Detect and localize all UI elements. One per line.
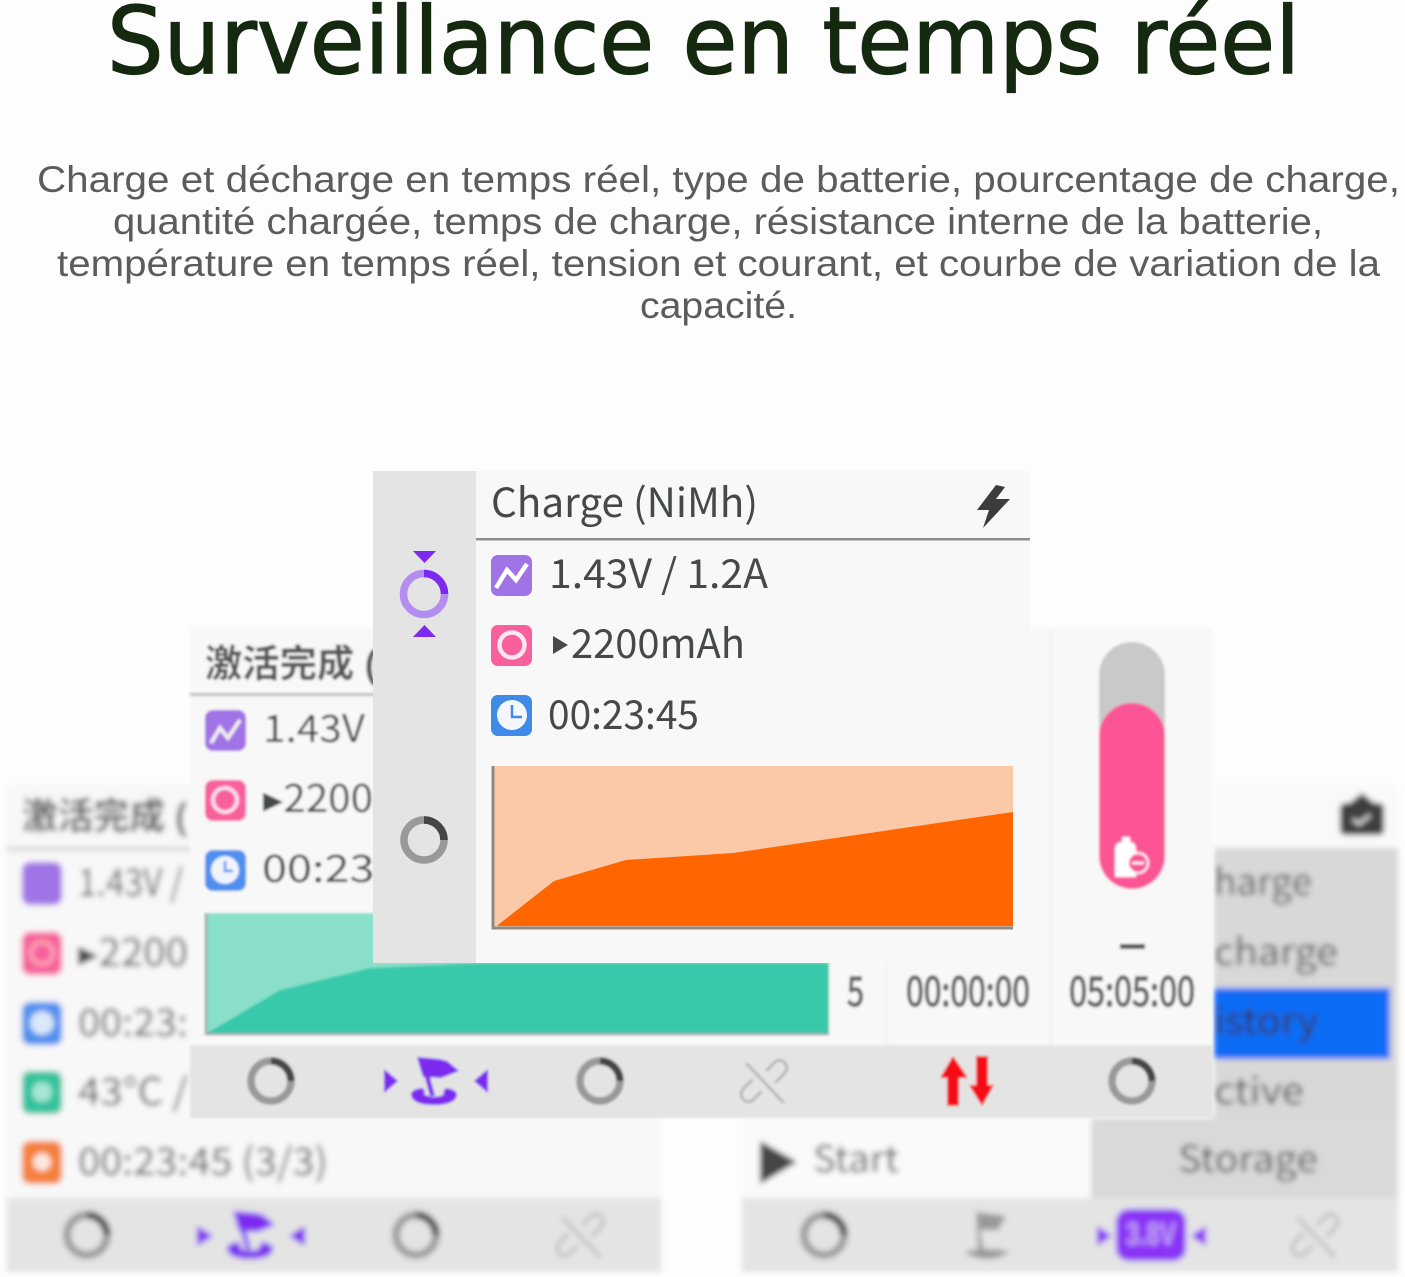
panel: back right screen (blurred): Storage	[1178, 1129, 1318, 1183]
panel: back right screen (blurred): istory	[1214, 991, 1318, 1045]
panel: back right screen (blurred)	[742, 785, 1398, 1272]
battery slider	[1099, 642, 1165, 889]
header: middle: 激活完成 (	[205, 644, 377, 686]
panel: back right screen (blurred): harge	[1214, 852, 1312, 906]
storage button	[1091, 1118, 1398, 1198]
bottom toolbar: back right: 3.8V	[1126, 1216, 1176, 1252]
description text block: Charge et décharge en temps réel, type de batterie, pourcentage de charge,	[37, 159, 1400, 200]
bottom toolbar: back right	[742, 1198, 1398, 1272]
panel: middle screen: 00:23:	[262, 838, 387, 893]
description text block	[37, 159, 1400, 326]
row: capacity: 2200mAh	[571, 612, 745, 670]
row: voltage and current: 1.43V / 1.2A	[549, 542, 769, 600]
row icon: voltage	[205, 710, 246, 751]
header: back left: 激活完成 (	[22, 796, 188, 837]
panel: back right screen (blurred): charge	[1214, 922, 1338, 976]
stat values: 5	[847, 958, 864, 1018]
row icon: duration	[22, 1141, 62, 1184]
panel: back left screen (blurred): 43°C /	[78, 1061, 188, 1116]
panel: middle screen: 05:05:00	[1069, 958, 1195, 1018]
start row	[742, 1118, 1090, 1198]
panel: back right screen (blurred): ctive	[1214, 1061, 1304, 1115]
bottom toolbar: back left	[7, 1198, 661, 1272]
description text block: température en temps réel, tension et courant, et courbe de variation de la	[57, 243, 1380, 284]
description text block: quantité chargée, temps de charge, résistance interne de la batterie,	[113, 201, 1323, 242]
row icon: time	[205, 850, 246, 891]
panel: middle screen	[190, 628, 1213, 1118]
icon: red arrows	[940, 1056, 994, 1106]
panel: back right screen (blurred): Start	[813, 1129, 899, 1183]
menu column	[1214, 848, 1398, 1118]
panel: back left screen (blurred): 1.43V /	[78, 852, 183, 907]
panel: middle screen: ▸2200	[263, 768, 373, 823]
description text block: capacité.	[640, 285, 797, 326]
panel: back left screen (blurred)	[6, 785, 661, 1273]
icon: purple selected ring	[404, 551, 444, 637]
row icon: voltage	[22, 862, 62, 905]
panel: back left screen (blurred): 00:23:	[78, 992, 188, 1047]
bottom toolbar: middle	[190, 1045, 1213, 1118]
sidebar	[373, 471, 476, 963]
teal area chart	[205, 913, 829, 1035]
panel: back left screen (blurred): 00:23:45 (3/3)	[78, 1131, 328, 1186]
panel: middle screen: 1.43V	[263, 698, 365, 753]
dash	[1120, 944, 1145, 949]
panel: front screen	[373, 471, 1030, 963]
panel: middle screen: 00:00:00	[906, 958, 1030, 1018]
row icon: temperature	[22, 1071, 62, 1114]
row icon: capacity	[22, 932, 62, 975]
icon: lightning	[977, 485, 1010, 528]
row icon: capacity	[205, 780, 246, 821]
header: Charge (NiMh)	[491, 471, 758, 529]
row: time: 00:23:45	[548, 683, 699, 741]
panel: back left screen (blurred): ▸2200	[78, 922, 188, 977]
icon: briefcase	[1340, 793, 1384, 835]
icon: grey ring	[404, 820, 444, 860]
row: capacity	[491, 612, 745, 670]
orange area chart	[492, 766, 1013, 929]
menu item highlighted	[1214, 988, 1390, 1059]
row icon: time	[22, 1002, 62, 1045]
